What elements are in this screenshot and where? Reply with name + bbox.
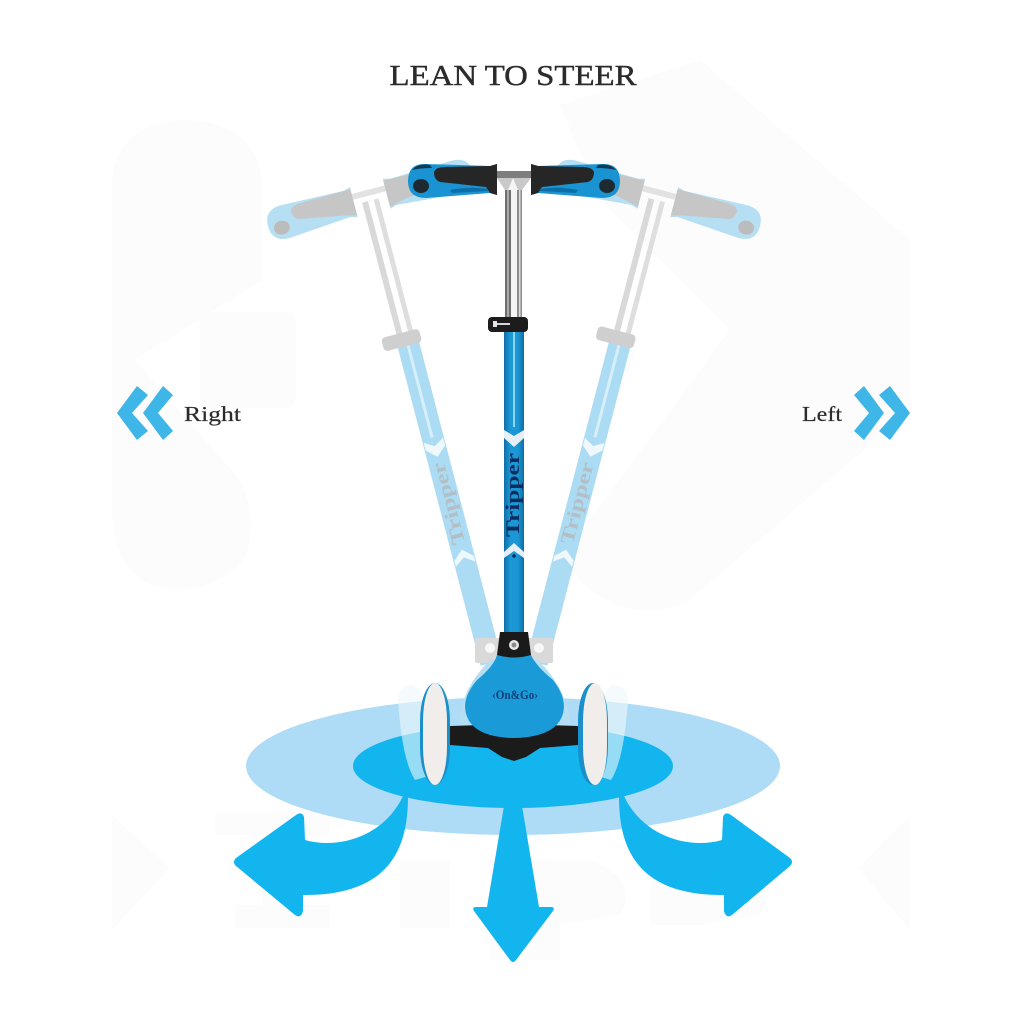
right grip [531,164,620,198]
ghost handlebar [551,156,764,243]
main scooter [408,164,620,785]
ghost stem [347,197,505,669]
icon: double chevron left [117,386,173,440]
handlebar bar [497,171,531,178]
ghost right wheel [594,685,628,780]
steering arrow: right [619,796,792,916]
title: LEAN TO STEER [390,60,637,92]
ghost base and hinge [459,638,570,725]
ghost stem: Tripper [557,459,599,546]
ghost stem: Tripper [428,459,470,547]
ghost handlebar [264,156,477,243]
label: left: Left [802,402,842,426]
left wheel [420,683,450,785]
left grip [408,164,497,198]
left direction indicator [802,386,910,440]
outer turning ellipse [246,697,780,835]
base logo: ‹On&Go› [492,687,538,702]
chevron down [504,430,524,447]
height clamp [488,317,528,332]
base body [465,655,564,738]
faint background watermark [112,60,910,960]
stem brand name: Tripper [503,452,524,537]
right wheel [578,683,608,785]
ghost scooter leaning right [264,156,594,690]
ghost stem [512,194,671,666]
stem chrome upper tubes [497,178,531,320]
inner turning ellipse [353,724,673,808]
deck [450,725,578,761]
stem lower tube [503,330,524,634]
label: right: Right [184,402,241,426]
right direction indicator [117,386,241,440]
icon: double chevron right [854,386,910,440]
steering arrow: centre [473,806,554,962]
ghost left wheel [398,685,432,780]
ghost scooter leaning left [434,156,764,690]
chevron up [504,543,524,558]
steering arrow: left [234,796,408,916]
hinge [497,632,531,658]
